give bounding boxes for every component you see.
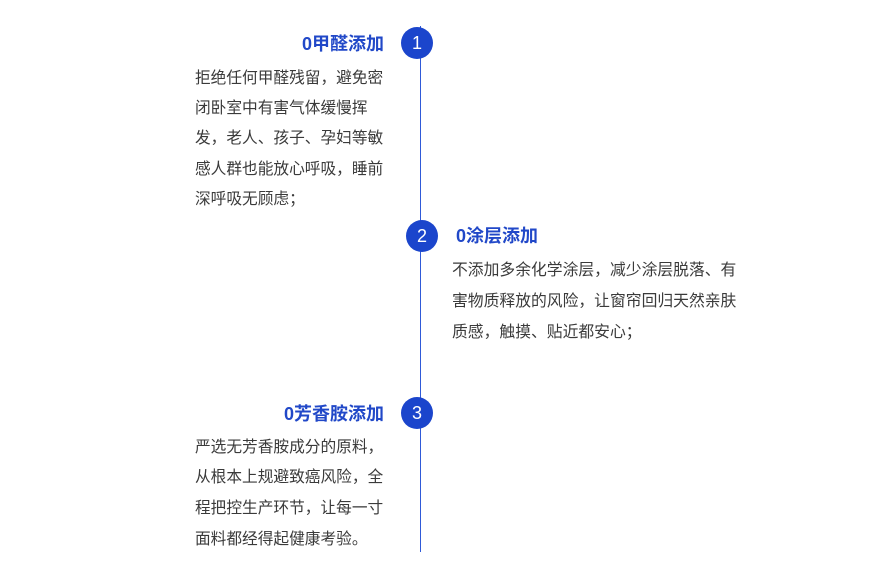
text block: item 3: 严选无芳香胺成分的原料， <box>195 439 383 456</box>
text block: item 1: 拒绝任何甲醛残留，避免密 <box>195 70 383 87</box>
text block: item 2 <box>452 261 736 341</box>
timeline vertical line <box>420 26 421 552</box>
text block: item 3 <box>195 438 383 548</box>
heading: 0 aromatic amine: 0芳香胺添加 <box>284 404 384 424</box>
heading: 0 coating: 0涂层添加 <box>456 226 538 246</box>
number badge 2 <box>406 220 438 252</box>
text block: item 2: 不添加多余化学涂层，减少涂层脱落、有 <box>452 262 736 279</box>
text block: item 1 <box>195 69 383 208</box>
text block: item 3: 程把控生产环节，让每一寸 <box>195 500 383 517</box>
text block: item 2: 质感，触摸、贴近都安心； <box>452 324 642 341</box>
text block: item 1: 感人群也能放心呼吸，睡前 <box>195 161 383 178</box>
text block: item 1: 闭卧室中有害气体缓慢挥 <box>195 100 368 117</box>
number badge 1 <box>401 27 433 59</box>
number badge 3 <box>401 397 433 429</box>
text block: item 3: 面料都经得起健康考验。 <box>195 531 368 548</box>
text block: item 1: 发，老人、孩子、孕妇等敏 <box>195 130 383 147</box>
text block: item 3: 从根本上规避致癌风险，全 <box>195 469 383 486</box>
heading: 0 formaldehyde: 0甲醛添加 <box>302 34 384 54</box>
number badge 2: 2 <box>417 226 427 246</box>
text block: item 2: 害物质释放的风险，让窗帘回归天然亲肤 <box>452 293 736 310</box>
number badge 1: 1 <box>412 33 422 53</box>
number badge 3: 3 <box>412 403 422 423</box>
text block: item 1: 深呼吸无顾虑； <box>195 191 305 208</box>
